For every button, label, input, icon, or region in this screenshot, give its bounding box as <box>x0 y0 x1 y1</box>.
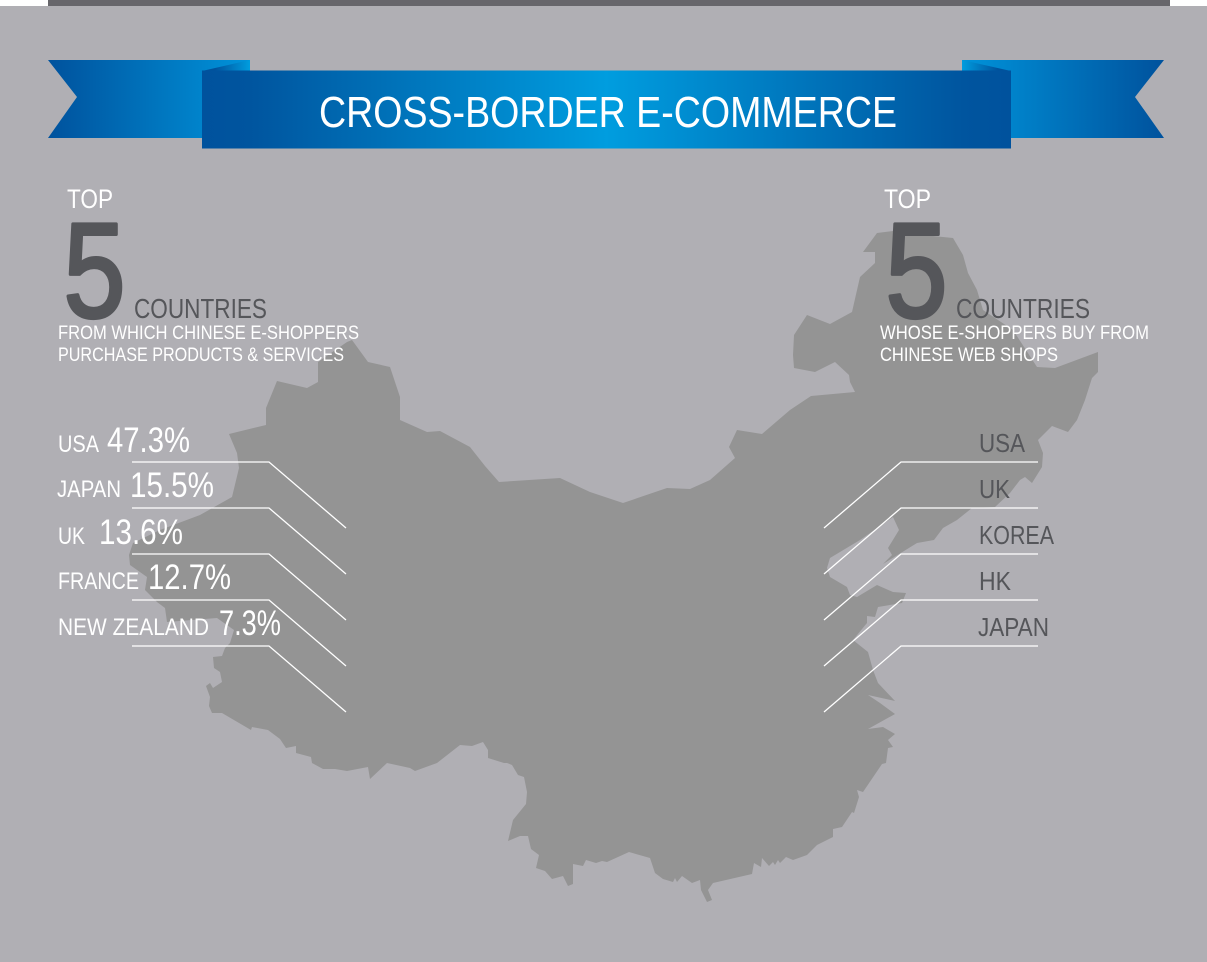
left ranking list with percentages: 47.3% <box>107 421 190 460</box>
left heading: top 5 countries: TOP <box>67 184 113 214</box>
right ranking list: KOREA <box>979 520 1055 550</box>
banner ribbon <box>48 60 1164 148</box>
left ranking list with percentages: 13.6% <box>99 513 183 552</box>
left ranking list with percentages <box>57 421 281 643</box>
right heading: top 5 countries: TOP <box>884 184 931 214</box>
left ranking list with percentages: 7.3% <box>219 604 281 643</box>
left ranking list with percentages: NEW ZEALAND <box>58 614 209 641</box>
left heading: top 5 countries: PURCHASE PRODUCTS & SERVICES <box>58 344 344 366</box>
left heading: top 5 countries <box>58 184 359 366</box>
title: CROSS-BORDER E-COMMERCE <box>319 88 897 137</box>
left heading: top 5 countries: FROM WHICH CHINESE E-SHOPPERS <box>58 322 359 344</box>
map of China <box>129 231 1098 902</box>
left ranking list with percentages: FRANCE <box>58 568 139 595</box>
right leader lines <box>824 462 1038 712</box>
right ranking list: HK <box>979 566 1012 596</box>
right heading: top 5 countries: CHINESE WEB SHOPS <box>880 344 1058 366</box>
right heading: top 5 countries: WHOSE E-SHOPPERS BUY FROM <box>880 322 1149 344</box>
right heading: top 5 countries <box>880 184 1149 366</box>
left heading: top 5 countries: 5 <box>64 195 126 346</box>
left ranking list with percentages: JAPAN <box>57 476 121 503</box>
top bar <box>0 0 1207 6</box>
left ranking list with percentages: USA <box>58 431 99 458</box>
right heading: top 5 countries: 5 <box>886 195 948 346</box>
left ranking list with percentages: 15.5% <box>130 466 214 505</box>
left ranking list with percentages: 12.7% <box>148 558 231 597</box>
right heading: top 5 countries: COUNTRIES <box>956 293 1090 324</box>
right ranking list: JAPAN <box>978 612 1049 642</box>
left leader lines <box>132 462 346 712</box>
right ranking list <box>978 428 1055 642</box>
right ranking list: USA <box>979 428 1026 458</box>
left heading: top 5 countries: COUNTRIES <box>134 293 267 324</box>
right ranking list: UK <box>979 474 1011 504</box>
left ranking list with percentages: UK <box>58 523 85 550</box>
